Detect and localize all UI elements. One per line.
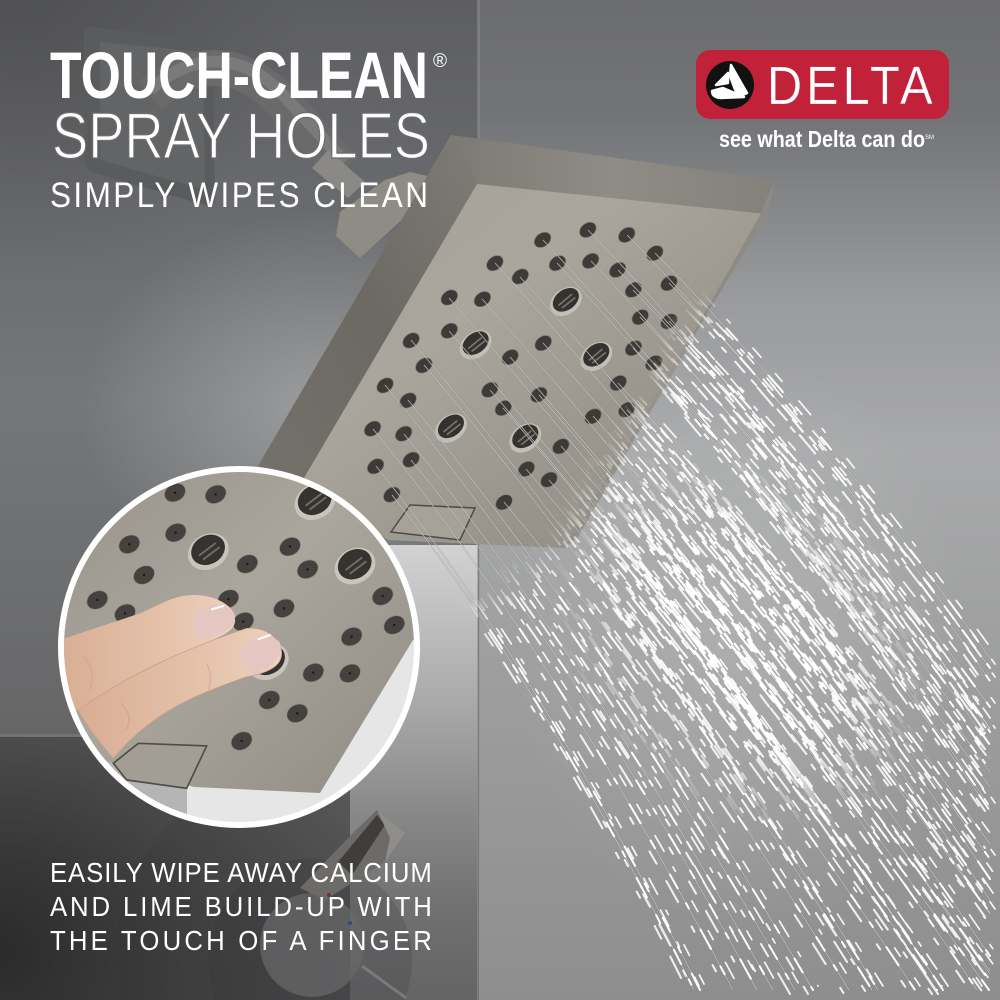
title <box>50 38 447 215</box>
valve trim and handle <box>115 765 412 1000</box>
white lens ring <box>58 466 420 828</box>
inset circle: finger wiping spray holes <box>50 460 430 840</box>
caption <box>50 857 432 956</box>
spray holes <box>361 219 680 513</box>
wordmark: DELTA <box>767 55 933 116</box>
head side band <box>258 135 478 478</box>
title line 1: TOUCH-CLEAN <box>50 38 428 112</box>
caption line 3: THE TOUCH OF A FINGER <box>50 925 432 956</box>
water spray <box>368 223 997 994</box>
wall flange and shower arm <box>84 27 445 258</box>
red badge <box>696 50 949 119</box>
arm collar <box>336 172 445 258</box>
caption line 1: EASILY WIPE AWAY CALCIUM <box>50 857 432 888</box>
handle lever <box>300 810 405 900</box>
head spray face <box>304 184 766 548</box>
enlarged plate <box>64 472 414 793</box>
square wall flange <box>84 27 215 205</box>
enlarged holes <box>83 476 408 754</box>
curved arm pipe <box>150 68 345 170</box>
large trim plate <box>115 765 350 1000</box>
service mark: SM <box>925 135 934 141</box>
overflow tab detail <box>113 743 207 788</box>
cold indicator dot <box>348 921 352 925</box>
caption line 2: AND LIME BUILD-UP WITH <box>50 891 432 922</box>
hot indicator dot <box>327 893 331 897</box>
Delta logo <box>696 50 949 152</box>
subtitle: SIMPLY WIPES CLEAN <box>50 177 428 215</box>
registered mark: ® <box>433 51 447 72</box>
fingers <box>60 595 282 758</box>
tagline: see what Delta can do <box>719 126 925 152</box>
overflow tab <box>391 505 475 540</box>
head top band <box>451 135 775 214</box>
title line 2: SPRAY HOLES <box>52 99 430 172</box>
threaded joint <box>312 150 365 198</box>
icon: Delta triangle <box>706 61 754 109</box>
shower head <box>258 135 775 548</box>
handle hub <box>260 893 364 997</box>
